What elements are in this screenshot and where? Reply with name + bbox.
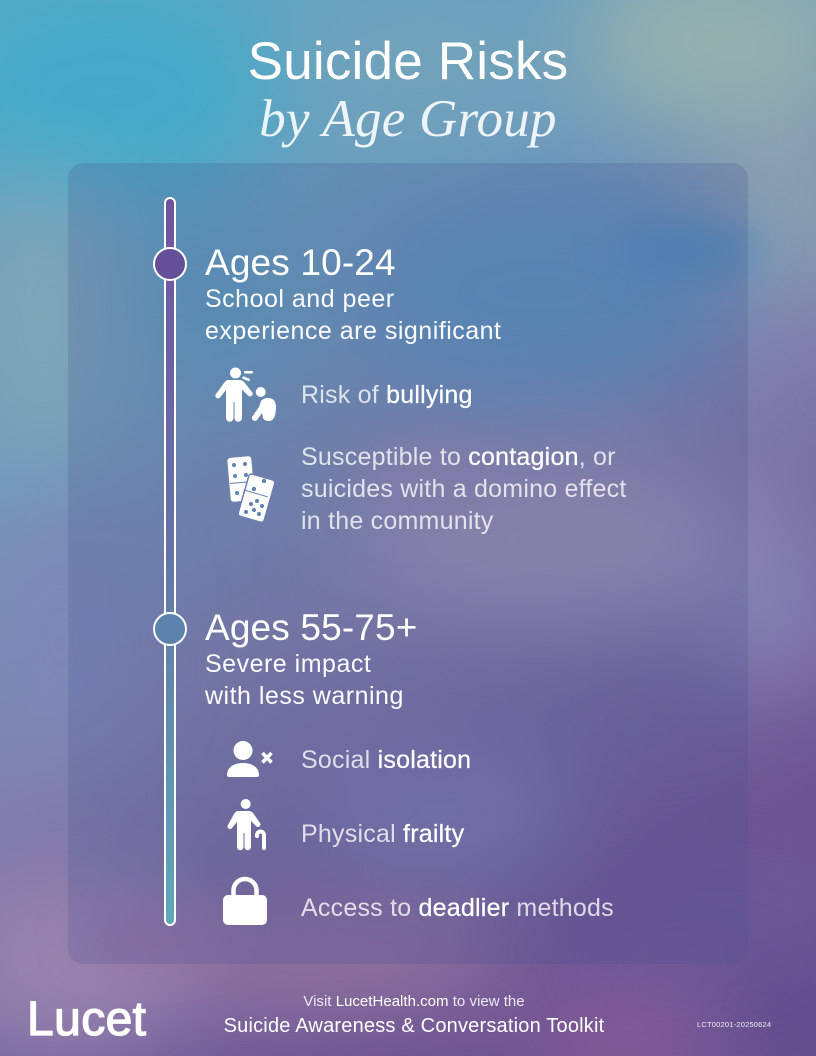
icon: dominoes (227, 456, 274, 522)
icon: social isolation (227, 741, 273, 777)
heading: ages 10-24: Ages 10-24 (205, 242, 396, 283)
marker: ages 10-24 (154, 248, 186, 280)
title: Suicide Risks (248, 32, 568, 91)
subheading: ages 10-24: experience are significant (205, 317, 502, 345)
panel: timeline card (68, 163, 748, 964)
footer call to action: Visit LucetHealth.com to view the (303, 993, 525, 1010)
subheading: ages 55-75+: Severe impact (205, 650, 371, 678)
logo: Lucet: Lucet (27, 993, 146, 1046)
title (248, 32, 568, 148)
subheading: ages 10-24 (205, 285, 502, 345)
icon: bullying (215, 368, 276, 422)
heading: ages 55-75+: Ages 55-75+ (205, 607, 418, 648)
document code: LCT00201-20250624 (697, 1020, 771, 1029)
text: physical frailty: Physical frailty (301, 820, 464, 848)
footer call to action (224, 993, 604, 1037)
subheading: ages 10-24: School and peer (205, 285, 395, 313)
marker: ages 55-75+ (154, 613, 186, 645)
footer call to action: Suicide Awareness & Conversation Toolkit (224, 1015, 604, 1037)
text: risk of bullying: Risk of bullying (301, 381, 473, 409)
icon: physical frailty (228, 799, 266, 850)
text: contagion: in the community (301, 507, 494, 535)
subheading: ages 55-75+ (205, 650, 404, 710)
subheading: ages 55-75+: with less warning (205, 682, 404, 710)
text: contagion (301, 443, 627, 535)
timeline rail with markers (153, 197, 187, 926)
text: contagion: Susceptible to contagion, or (301, 443, 616, 471)
text: deadlier methods: Access to deadlier methods (301, 894, 614, 922)
text: contagion: suicides with a domino effect (301, 475, 627, 503)
icon: padlock (223, 876, 267, 925)
title: by Age Group (259, 90, 557, 148)
text: social isolation: Social isolation (301, 746, 471, 774)
